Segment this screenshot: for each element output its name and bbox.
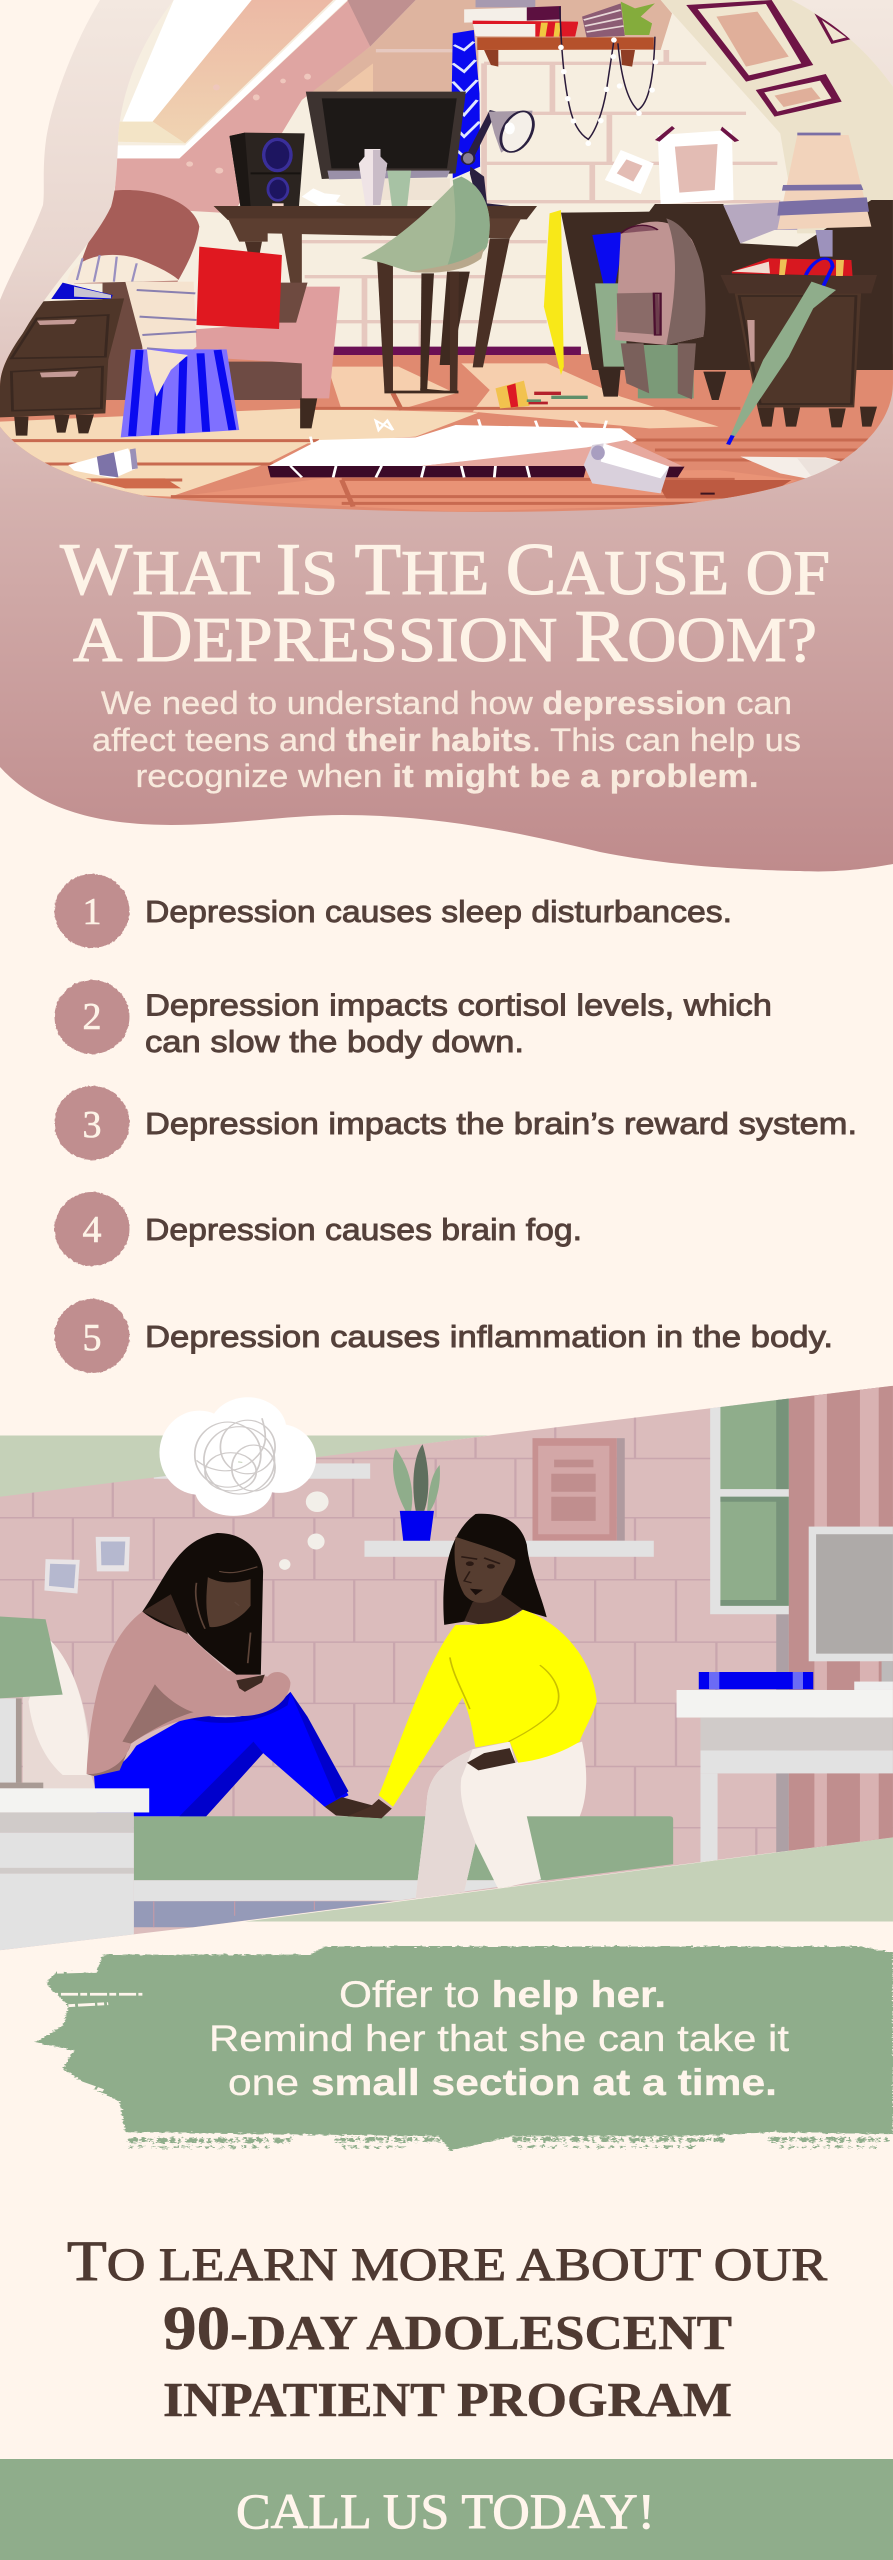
striped pillow [67, 255, 179, 283]
photos on wall [44, 1537, 130, 1594]
right nightstand, lamp, binder, umbrella [720, 133, 877, 445]
list item 3: Depression impacts the brain’s reward system. [145, 1106, 857, 1141]
intro paragraph: recognize when it might be a problem. [136, 758, 758, 794]
blue book [699, 1672, 813, 1689]
list item 4: Depression causes brain fog. [145, 1212, 582, 1247]
illustration: two girls on a bed [0, 1380, 893, 1954]
intro paragraph: affect teens and their habits . This can help us [92, 722, 801, 758]
list item 2: Depression impacts cortisol levels, which [145, 988, 772, 1022]
picture frames [686, 0, 854, 117]
dark sofa [561, 200, 893, 400]
chair [361, 177, 490, 393]
call to action heading: INPATIENT PROGRAM [163, 2372, 732, 2427]
potted plant [393, 1444, 440, 1541]
call to action heading [67, 2230, 828, 2427]
list item 5: 5 [82, 1317, 102, 1359]
monitor [809, 1527, 893, 1690]
title [60, 529, 830, 678]
wall shelf [364, 1541, 654, 1557]
bedside lamp [0, 1617, 63, 1788]
blue striped throw [121, 349, 239, 437]
footer call bar [0, 2459, 893, 2560]
list item 4: 4 [82, 1209, 102, 1251]
string lights [558, 7, 658, 146]
list item 5: Depression causes inflammation in the body. [145, 1319, 833, 1354]
call to action heading: 90-DAY ADOLESCENT [163, 2295, 732, 2363]
list item 2: 2 [82, 996, 102, 1038]
sad girl [87, 1533, 387, 1818]
footer call bar: CALL US TODAY! [236, 2483, 655, 2539]
blue zigzag scarf [452, 30, 480, 178]
desk [214, 206, 537, 367]
list item 3 [54, 1086, 857, 1160]
curtains [776, 1380, 893, 1855]
yellow scarf [544, 210, 564, 375]
computer monitor [306, 92, 466, 200]
list item 1: 1 [82, 891, 102, 933]
desk items: vase, cup, tissue [302, 149, 411, 206]
bed [134, 1816, 673, 1927]
illustration: messy bedroom [0, 0, 893, 521]
title: A DEPRESSION ROOM? [73, 596, 817, 678]
list item 5 [54, 1299, 833, 1373]
list item 2: can slow the body down. [145, 1024, 524, 1059]
callout text: one small section at a time. [228, 2062, 777, 2103]
armchair [74, 190, 340, 428]
headboard pillow [23, 1638, 96, 1789]
hanging paper frames [605, 126, 739, 204]
panel: hero mauve wave [0, 0, 893, 871]
left nightstand with binder [0, 283, 124, 436]
speaker [230, 133, 305, 206]
red cushion [196, 247, 282, 329]
list item 4 [54, 1192, 582, 1266]
window [710, 1380, 789, 1614]
backpack and clothes [592, 218, 705, 399]
floor [0, 347, 893, 521]
thought bubble [159, 1397, 329, 1570]
call to action heading: TO LEARN MORE ABOUT OUR [67, 2230, 828, 2293]
toppled white cup [68, 448, 181, 488]
callout text [209, 1974, 790, 2103]
wall shelf with books and plant [464, 0, 655, 67]
hanging blanket [125, 282, 197, 350]
callout text: Offer to help her. [339, 1974, 666, 2015]
desk [677, 1690, 893, 1865]
overturned white box [584, 444, 715, 495]
desk lamp [462, 110, 539, 206]
list item 1: Depression causes sleep disturbances. [145, 894, 732, 929]
intro paragraph [92, 685, 801, 794]
poster on wall [532, 1438, 625, 1541]
nightstand [0, 1788, 149, 1950]
list item 2 [54, 980, 772, 1059]
white shaggy rug [268, 419, 685, 477]
callout text: Remind her that she can take it [209, 2018, 790, 2059]
cushion [28, 1638, 89, 1775]
list item 3: 3 [82, 1104, 102, 1146]
list item 1 [54, 874, 732, 948]
title: WHAT IS THE CAUSE OF [60, 529, 830, 611]
wall shelf upper [154, 1463, 370, 1479]
comforting girl [347, 1514, 597, 1899]
panel: green brush stroke [34, 1947, 893, 2151]
floor clutter: cup, pens, paper [495, 381, 847, 480]
intro paragraph: We need to understand how depression can [101, 685, 792, 721]
